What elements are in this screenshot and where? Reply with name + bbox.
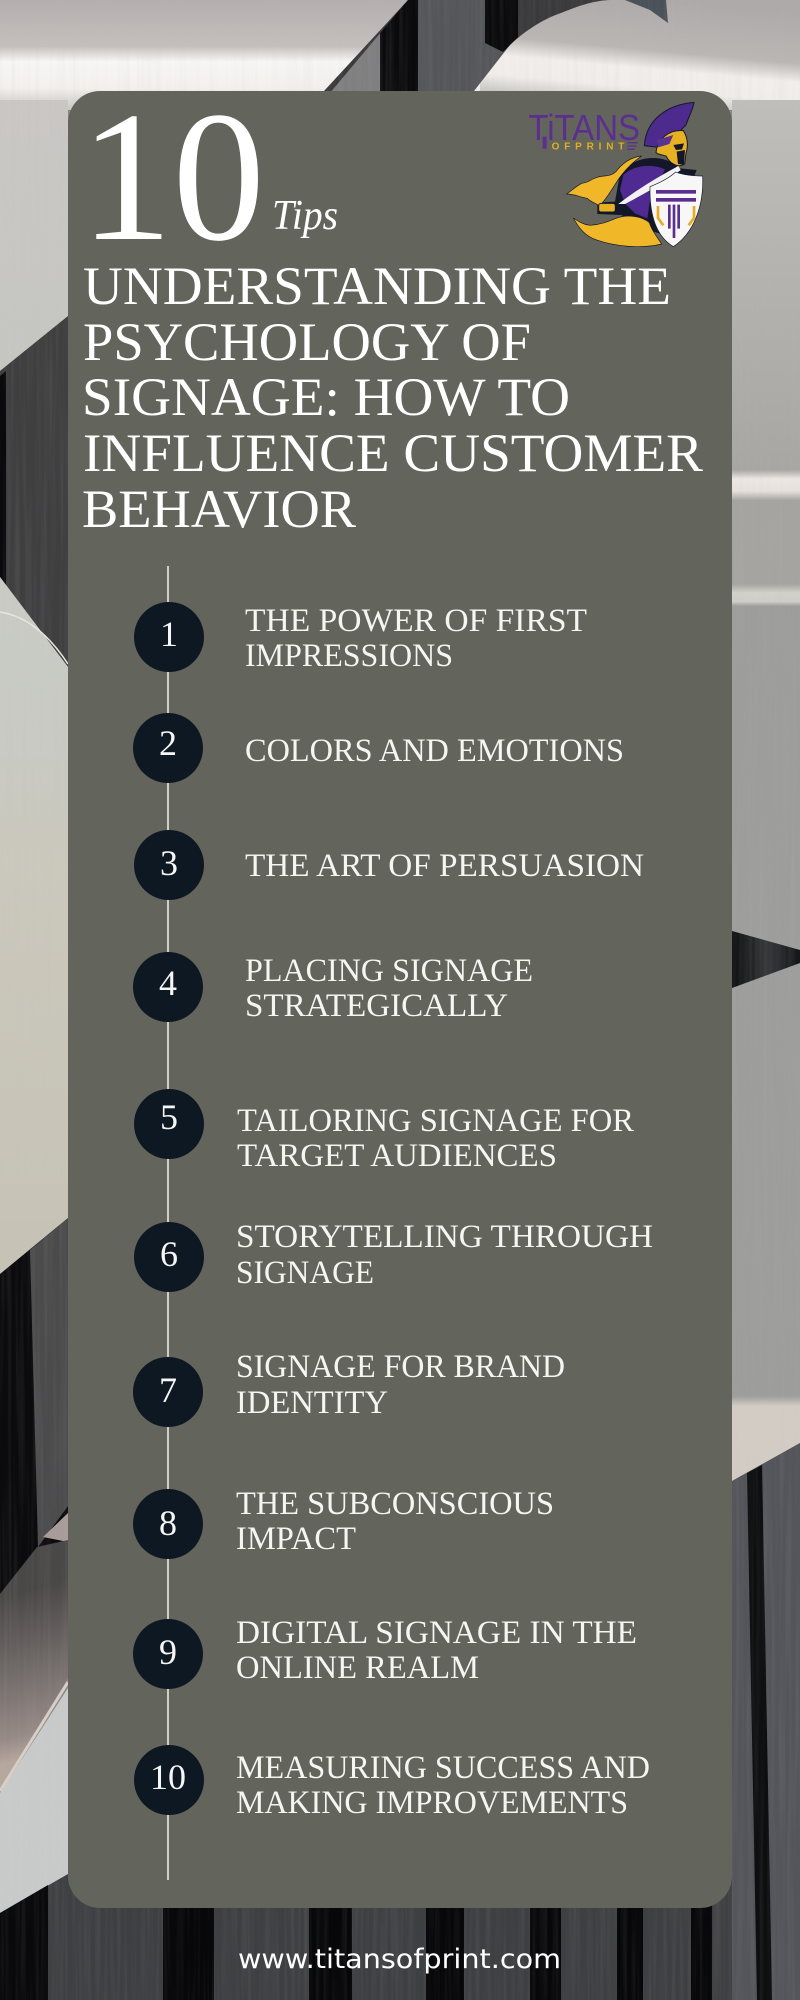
- tip 5: 5: [160, 1097, 178, 1137]
- tip 6: STORYTELLING THROUGH: [236, 1219, 653, 1255]
- title: main heading: UNDERSTANDING THE: [83, 256, 671, 316]
- title: main heading: [82, 256, 703, 539]
- panel: main card: [68, 91, 732, 1908]
- tip 4: 4: [159, 963, 177, 1003]
- tip 2: [133, 713, 624, 783]
- logo wordmark: TiTANS: [528, 107, 640, 148]
- tip 9: ONLINE REALM: [236, 1650, 479, 1686]
- tip 2: COLORS AND EMOTIONS: [245, 733, 624, 769]
- tip 4: [133, 952, 533, 1024]
- tip 3: THE ART OF PERSUASION: [245, 848, 644, 884]
- tip 3: [134, 830, 644, 900]
- tip 9: 9: [159, 1632, 177, 1672]
- logo wordmark: OFPRINT: [552, 141, 624, 152]
- tip 1: IMPRESSIONS: [245, 638, 453, 674]
- title: main heading: SIGNAGE: HOW TO: [82, 367, 570, 427]
- tip 7: SIGNAGE FOR BRAND: [236, 1349, 565, 1385]
- tip 9: DIGITAL SIGNAGE IN THE: [236, 1615, 637, 1651]
- tip 8: [133, 1486, 554, 1559]
- tip 7: IDENTITY: [236, 1385, 388, 1421]
- tip 1: [134, 602, 587, 674]
- tip 7: 7: [159, 1370, 177, 1410]
- title: main heading: PSYCHOLOGY OF: [83, 312, 531, 372]
- tip 1: THE POWER OF FIRST: [245, 603, 587, 639]
- tip 4: PLACING SIGNAGE: [245, 953, 533, 989]
- timeline: vertical connector line: [167, 566, 169, 1880]
- tip 1: 1: [160, 614, 178, 654]
- tip 10: [134, 1745, 650, 1821]
- tip 5: TARGET AUDIENCES: [237, 1138, 557, 1174]
- tip 6: [134, 1219, 653, 1292]
- tip 3: 3: [160, 843, 178, 883]
- tip 6: 6: [160, 1234, 178, 1274]
- tip 5: TAILORING SIGNAGE FOR: [237, 1103, 634, 1139]
- heading: big number 10: 10: [80, 74, 265, 280]
- footer: website address: www.titansofprint.com: [238, 1944, 561, 1975]
- logo: Titans of Print: [528, 102, 703, 247]
- tip 9: [133, 1615, 637, 1689]
- tip 8: THE SUBCONSCIOUS: [236, 1486, 554, 1522]
- tip 2: 2: [159, 723, 177, 763]
- tip 5: [134, 1089, 634, 1174]
- tip 8: IMPACT: [236, 1521, 356, 1557]
- title: main heading: BEHAVIOR: [82, 479, 356, 539]
- icon: spartan warrior with shield: [567, 102, 703, 247]
- tip 10: 10: [150, 1757, 186, 1797]
- title: main heading: INFLUENCE CUSTOMER: [83, 423, 703, 483]
- tip 10: MAKING IMPROVEMENTS: [236, 1785, 628, 1821]
- tip 8: 8: [159, 1503, 177, 1543]
- tip 6: SIGNAGE: [236, 1255, 374, 1291]
- tip 10: MEASURING SUCCESS AND: [236, 1750, 650, 1786]
- tip 4: STRATEGICALLY: [245, 988, 508, 1024]
- heading: Tips: Tips: [272, 193, 338, 239]
- tip 7: [133, 1349, 565, 1427]
